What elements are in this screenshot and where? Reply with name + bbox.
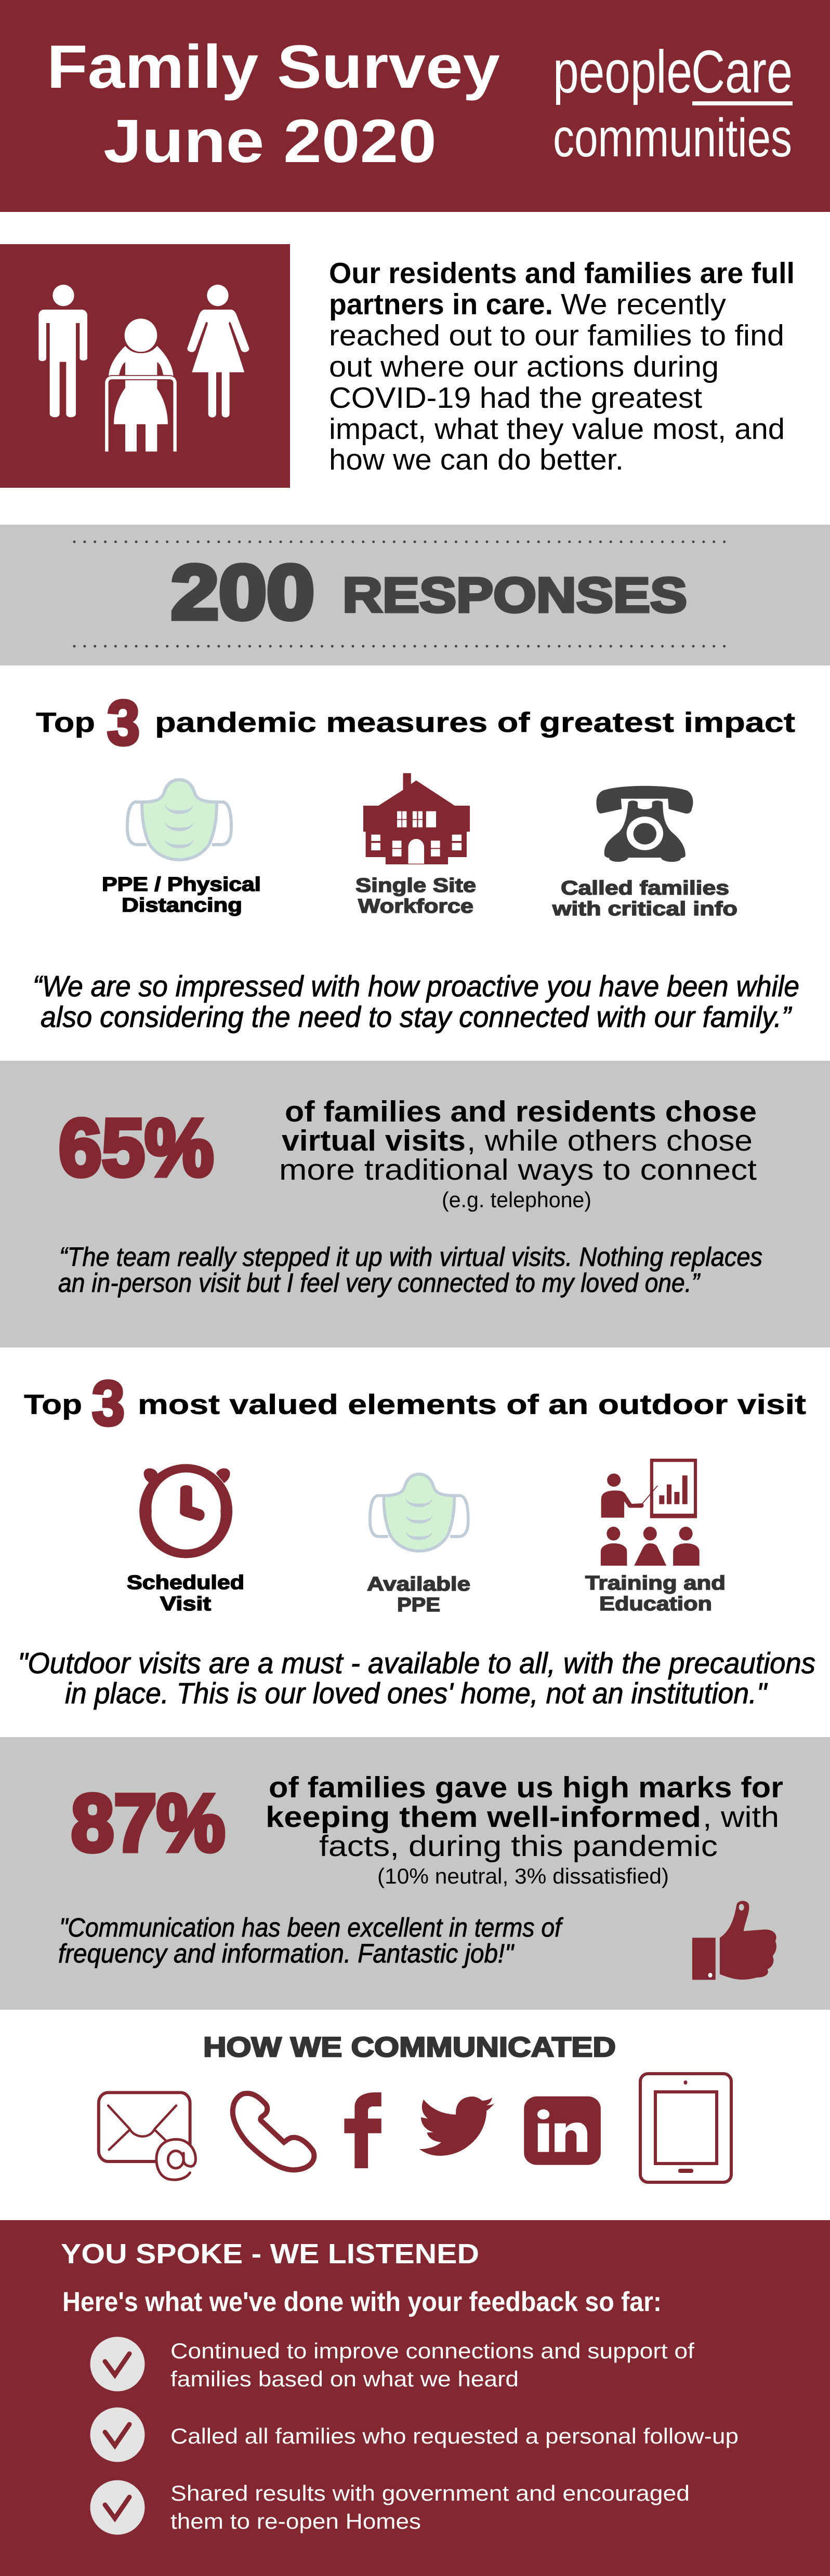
label: Available PPE: PPE <box>397 1594 440 1616</box>
label: Scheduled Visit: Visit <box>160 1593 211 1615</box>
heading: you spoke we listened: YOU SPOKE - WE LISTENED <box>61 2238 479 2270</box>
heading: top 3 pandemic measures: pandemic measures of greatest impact <box>155 707 795 738</box>
quote: virtual visits: an in-person visit but I feel very connected to my loved one.” <box>58 1268 701 1298</box>
label: Called families with critical info: with critical info <box>552 898 737 920</box>
logo: peopleCare communities <box>553 38 793 168</box>
quote: outdoor visits: in place. This is our loved ones' home, not an institution." <box>65 1677 768 1710</box>
text block: well-informed finding: keeping them well-informed <box>266 1800 701 1834</box>
big number 200: 200 <box>171 550 314 635</box>
text block: intro paragraph: Our residents and families are full <box>329 257 795 290</box>
text block: well-informed finding <box>266 1771 783 1888</box>
subheading: feedback: Here's what we've done with your feedback so far: <box>62 2287 662 2317</box>
label RESPONSES: RESPONSES <box>342 568 687 623</box>
heading: how we communicated: HOW WE COMMUNICATED <box>203 2032 616 2063</box>
heading: top 3 outdoor visit elements: Top <box>24 1389 82 1420</box>
stat: 65%: 65% <box>59 1103 214 1193</box>
item: shared results <box>90 2480 690 2535</box>
text block: intro paragraph: out where our actions during <box>329 350 719 383</box>
title: Family Survey <box>47 33 500 101</box>
text block: virtual visits finding: , while others chose <box>467 1124 753 1157</box>
label: PPE / Physical Distancing <box>102 874 261 916</box>
text block: intro paragraph: impact, what they value most, and <box>329 412 785 446</box>
icon: rotary telephone <box>596 786 693 862</box>
label: Single Site Workforce <box>355 875 476 917</box>
label: Training and Education: Training and <box>585 1572 726 1594</box>
icon: thumbs up <box>692 1901 776 1980</box>
icon: check <box>90 2480 144 2535</box>
label: Single Site Workforce: Single Site <box>355 875 476 897</box>
icon: twitter <box>419 2097 494 2156</box>
icon: alarm clock <box>139 1464 232 1558</box>
stat: 87%: 87% <box>71 1778 225 1868</box>
panel: 65 percent virtual visits <box>0 1061 830 1347</box>
heading: top 3 outdoor visit elements: most valued elements of an outdoor visit <box>138 1389 806 1420</box>
text block: intro paragraph: how we can do better. <box>329 443 624 476</box>
label: PPE / Physical Distancing: Distancing <box>122 895 242 916</box>
icon: facebook <box>344 2092 381 2168</box>
label: Scheduled Visit: Scheduled <box>127 1572 244 1594</box>
text block: virtual visits finding <box>279 1095 757 1212</box>
quote: proactive: also considering the need to stay connected with our family.” <box>41 1000 793 1034</box>
panel: residents and families intro <box>0 244 290 488</box>
label: Training and Education <box>585 1572 726 1615</box>
text block: intro paragraph: We recently <box>561 288 727 321</box>
text block: virtual visits finding: (e.g. telephone) <box>442 1187 591 1212</box>
item: shared results: Shared results with government and encouraged <box>170 2481 690 2505</box>
item: connections and support: families based on what we heard <box>170 2367 519 2391</box>
label: Scheduled Visit <box>127 1572 244 1615</box>
icon: presenter with audience <box>601 1459 700 1566</box>
item: shared results: them to re-open Homes <box>170 2509 421 2533</box>
quote: communication <box>58 1913 563 1968</box>
text block: well-informed finding: of families gave us high marks for <box>269 1771 783 1804</box>
label: Available PPE <box>367 1573 470 1616</box>
text block: intro paragraph: COVID-19 had the greatest <box>329 381 702 415</box>
icon: email <box>99 2092 195 2180</box>
icon: linkedin <box>524 2097 601 2165</box>
panel: you spoke we listened <box>0 2220 830 2576</box>
heading: top 3 pandemic measures: 3 <box>107 687 140 758</box>
quote: outdoor visits <box>18 1647 815 1710</box>
label: Called families with critical info: Called families <box>561 877 729 899</box>
item: personal follow-up <box>90 2407 739 2462</box>
quote: proactive: “We are so impressed with how proactive you have been while <box>33 970 799 1003</box>
quote: virtual visits <box>58 1242 762 1298</box>
title <box>47 33 500 176</box>
text block: intro paragraph: partners in care. <box>329 288 553 321</box>
panel: 200 responses <box>0 525 830 665</box>
label: PPE / Physical Distancing: PPE / Physical <box>102 874 261 896</box>
heading: top 3 pandemic measures: Top <box>36 707 95 738</box>
heading: top 3 pandemic measures <box>36 687 795 758</box>
item: connections and support: Continued to improve connections and support of <box>170 2339 694 2363</box>
icon: face mask <box>370 1474 468 1551</box>
quote: communication: frequency and information. Fantastic job!" <box>58 1939 515 1968</box>
label: Single Site Workforce: Workforce <box>358 896 473 917</box>
quote: proactive <box>33 970 799 1034</box>
panel: header <box>0 0 830 212</box>
text block: virtual visits finding: of families and residents chose <box>285 1095 757 1128</box>
label: Training and Education: Education <box>599 1593 712 1615</box>
icon: face mask <box>127 780 231 860</box>
text block: well-informed finding: facts, during this pandemic <box>319 1830 718 1863</box>
icon: phone handset <box>233 2093 314 2170</box>
icon: tablet <box>640 2074 731 2182</box>
heading: top 3 outdoor visit elements <box>24 1368 806 1438</box>
icon: school house <box>363 773 470 864</box>
logo: peopleCare communities: Care <box>691 38 793 105</box>
label: Called families with critical info <box>552 877 737 920</box>
heading: top 3 outdoor visit elements: 3 <box>92 1368 125 1438</box>
text block: intro paragraph: reached out to our families to find <box>329 319 784 352</box>
panel: 87 percent well-informed <box>0 1737 830 2010</box>
quote: communication: "Communication has been excellent in terms of <box>59 1913 563 1942</box>
text block: well-informed finding: , with <box>703 1800 779 1834</box>
label: Available PPE: Available <box>367 1573 470 1595</box>
text block: virtual visits finding: more traditional ways to connect <box>279 1153 757 1186</box>
text block: virtual visits finding: virtual visits <box>282 1124 466 1157</box>
icon: family figures with walker <box>38 285 249 451</box>
item: connections and support <box>90 2337 694 2392</box>
icon: check <box>90 2337 144 2392</box>
logo: peopleCare communities: people <box>553 38 692 105</box>
title: June 2020 <box>103 107 437 176</box>
item: personal follow-up: Called all families who requested a personal follow-up <box>170 2424 739 2448</box>
quote: virtual visits: “The team really stepped it up with virtual visits. Nothing replaces <box>59 1242 762 1272</box>
icon: check <box>90 2407 144 2462</box>
quote: outdoor visits: "Outdoor visits are a must - available to all, with the precautions <box>18 1647 815 1680</box>
text block: well-informed finding: (10% neutral, 3% dissatisfied) <box>377 1864 669 1888</box>
text block: intro paragraph <box>329 257 795 476</box>
